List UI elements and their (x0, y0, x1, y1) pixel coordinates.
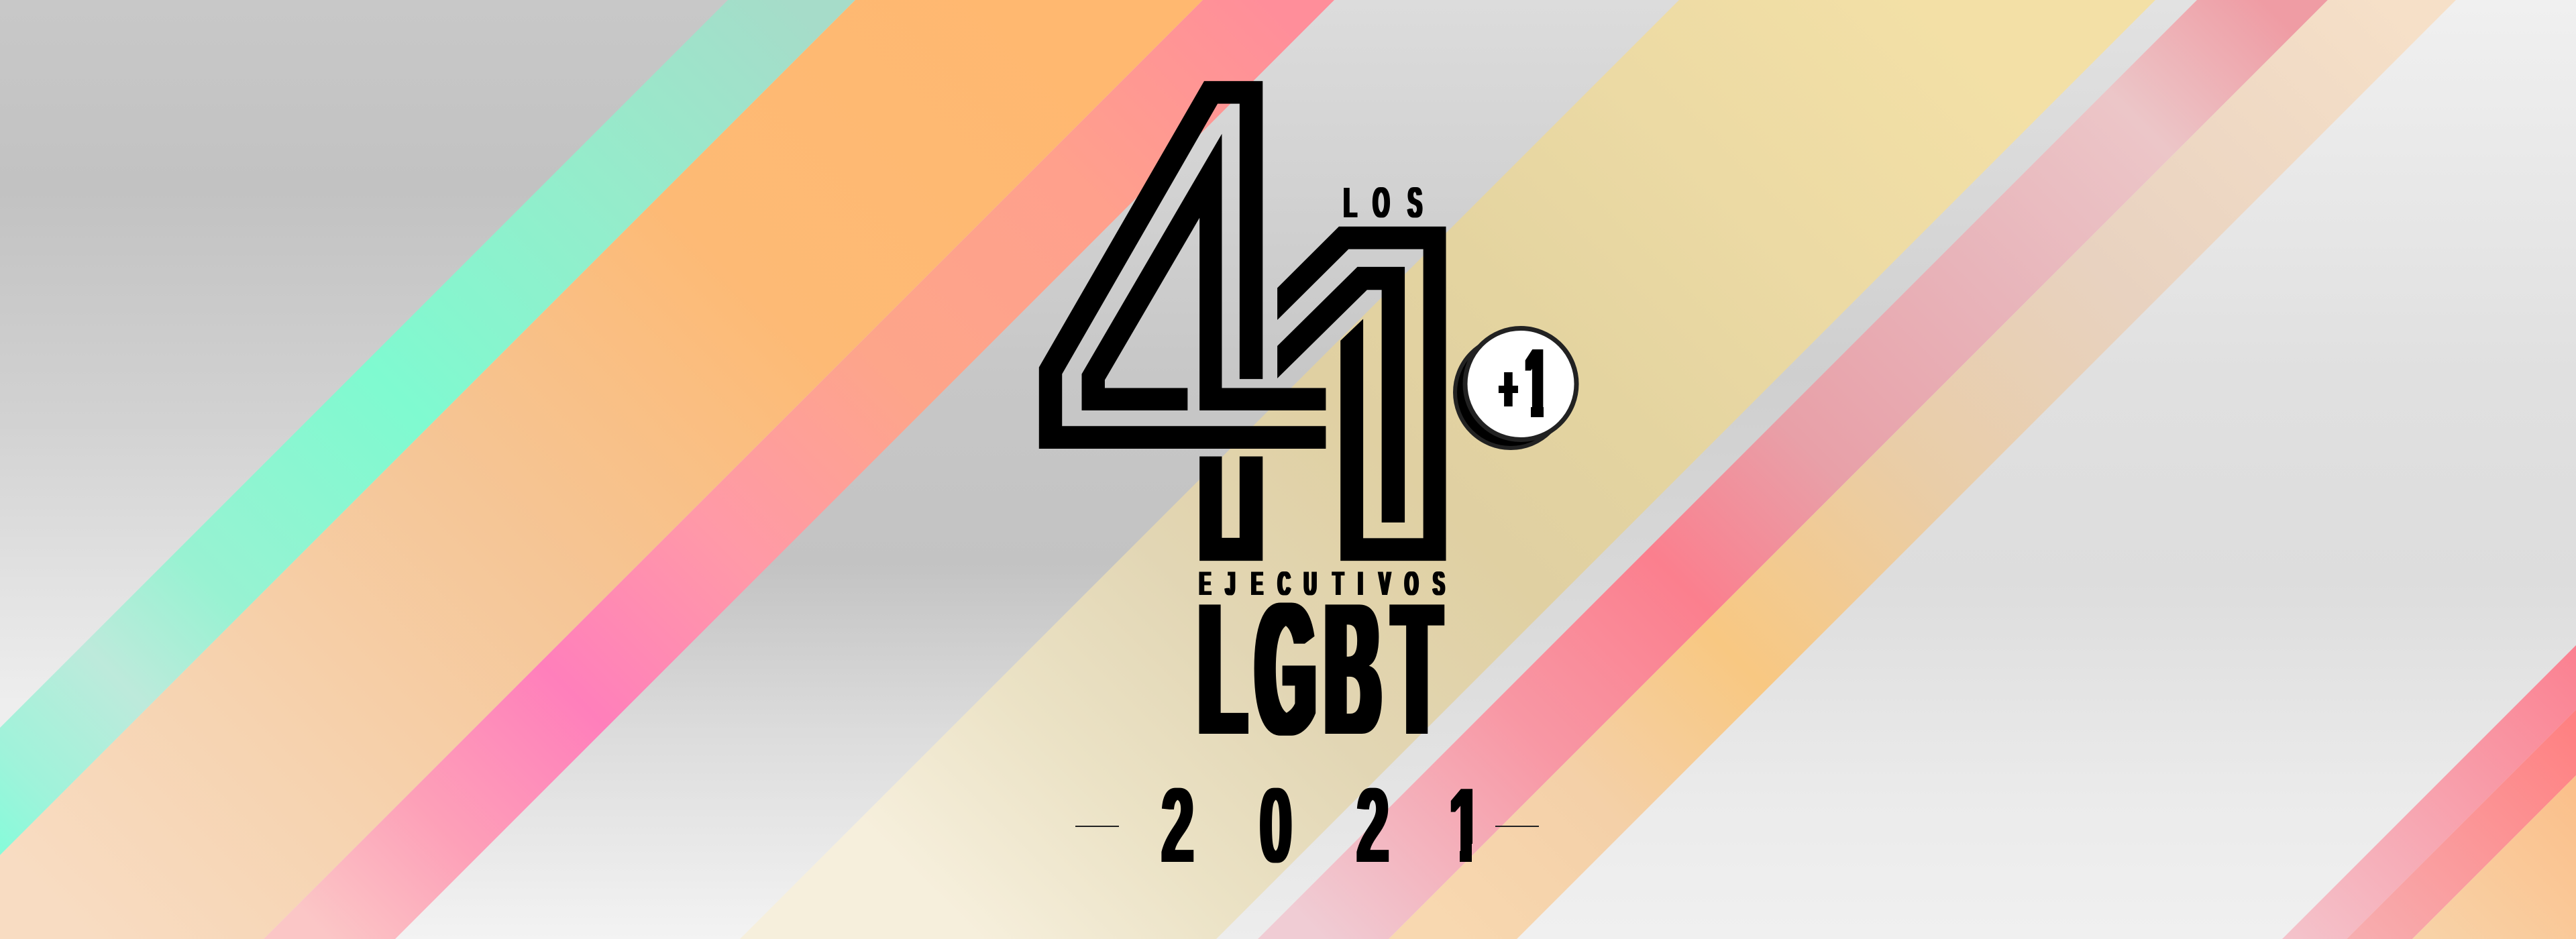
heading: LGBT: LGBT (1199, 565, 1440, 774)
logo: numeral 41 (1039, 81, 1446, 561)
numeral 4: lower stem (1199, 456, 1263, 561)
badge shadow circle (1455, 337, 1566, 448)
numeral 4: outer line (1039, 81, 1326, 449)
diagonal band: rose (1258, 0, 2328, 939)
left rule (1075, 826, 1119, 827)
heading: LOS: LOS (1344, 178, 1422, 227)
badge white circle (1465, 329, 1576, 440)
diagonal band: orange (0, 0, 1203, 939)
right rule (1495, 826, 1539, 827)
background: left grey field (0, 0, 731, 939)
badge label (1499, 349, 1544, 417)
diagonal band: pink (264, 0, 1334, 939)
year: 2021: 2021 (1161, 767, 1481, 885)
diagonal band: mint (0, 0, 855, 939)
background: right grey field (1514, 0, 2576, 939)
badge label: 1 (1525, 328, 1548, 438)
numeral 1: inner line (1277, 267, 1405, 522)
badge: +1 (1455, 328, 1576, 448)
diagonal band: peach (1389, 0, 2456, 939)
heading: EJECUTIVOS: EJECUTIVOS (1199, 565, 1445, 602)
corner band: light pink (2282, 645, 2576, 939)
background: centre grey band (392, 0, 1682, 939)
background: narrow grey stripe (1214, 0, 2200, 939)
numeral 4: inner line (1082, 133, 1326, 410)
corner band: peach (2412, 775, 2576, 939)
diagonal band: cream (740, 0, 2155, 939)
badge label: + (1500, 352, 1517, 427)
numeral 1: outer line (1277, 227, 1446, 561)
corner band: deep pink (2347, 710, 2576, 939)
